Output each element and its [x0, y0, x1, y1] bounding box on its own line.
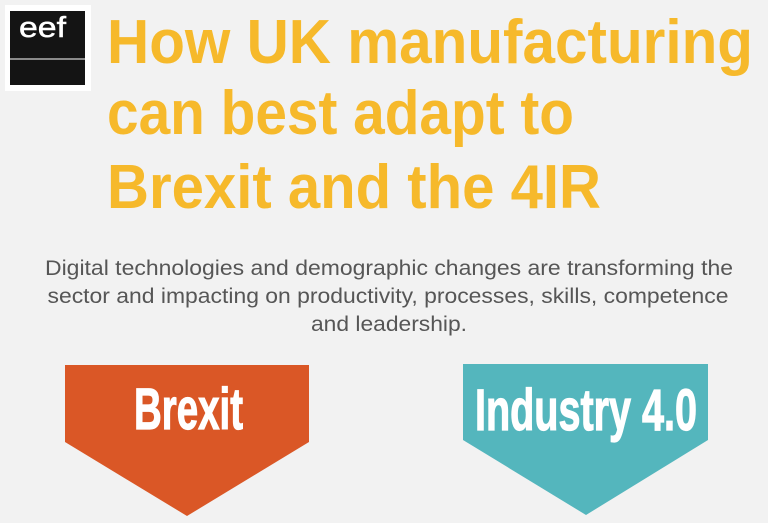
intro text: and leadership.: [311, 313, 467, 336]
intro text: Digital technologies and demographic changes are transforming the: [45, 257, 733, 280]
title: [107, 8, 753, 222]
title: can best adapt to: [107, 79, 574, 148]
title: Brexit and the 4IR: [107, 153, 601, 222]
panel: Industry 4.0 arrow: [463, 364, 708, 515]
intro text: [45, 257, 733, 336]
logo: eef: [5, 5, 91, 91]
panel: Brexit arrow: [65, 365, 309, 516]
intro text: sector and impacting on productivity, processes, skills, competence: [48, 285, 728, 308]
panel: Brexit arrow: Brexit: [134, 377, 243, 442]
logo: eef: eef: [19, 12, 67, 44]
